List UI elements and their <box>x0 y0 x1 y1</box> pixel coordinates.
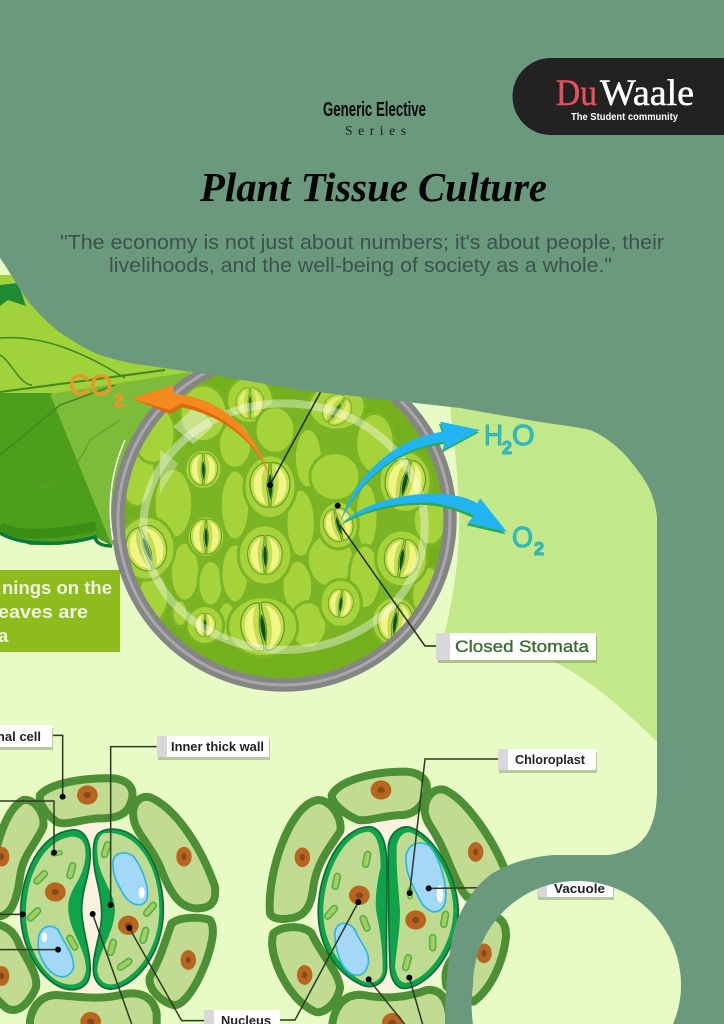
label: Vacuole <box>537 876 614 900</box>
quote <box>60 232 664 277</box>
label: O2: 2 <box>534 539 544 559</box>
label: Chloroplast: Chloroplast <box>515 752 586 767</box>
arrow: O2 out <box>340 494 507 534</box>
title: Plant Tissue Culture <box>199 164 547 210</box>
diagram: closed stoma cell cluster <box>270 772 508 1024</box>
magnifying lens with stomata <box>110 346 457 692</box>
logo: DuWaale: The Student community <box>571 111 678 123</box>
label: Inner thick wall: Inner thick wall <box>171 739 264 754</box>
leader lines: open stoma <box>0 735 205 1024</box>
label: H2O: H <box>484 420 503 452</box>
diagram: open stoma cell cluster <box>0 778 215 1024</box>
label: Inner thick wall <box>157 736 270 760</box>
label: CO2: CO <box>69 370 112 402</box>
arrow: CO2 in <box>132 385 270 480</box>
label: Closed Stomata <box>436 633 597 663</box>
arrow: H2O out <box>341 422 480 521</box>
label: O2: O <box>512 522 533 554</box>
label: epidermal cell <box>0 725 53 750</box>
heading: Generic Elective Series <box>323 99 426 138</box>
label: H2O: 2 <box>502 438 512 458</box>
heading: Generic Elective Series: Generic Elective <box>323 99 426 121</box>
label: CO2: 2 <box>114 391 124 411</box>
leader lines: closed stoma <box>280 759 537 1024</box>
logo: DuWaale <box>512 58 724 135</box>
pointer lines and dots in the lens <box>267 390 438 646</box>
text panel: openings on the leaves <box>0 570 120 652</box>
label: H2O <box>484 420 535 458</box>
label: CO2 <box>69 370 124 411</box>
text panel: openings on the leaves: nings on the <box>2 577 112 598</box>
label: Chloroplast <box>498 749 597 773</box>
label: Closed Stomata: Closed Stomata <box>455 637 590 656</box>
leaf illustration <box>0 275 260 546</box>
label: Nucleus <box>204 1010 280 1024</box>
label: H2O: O <box>512 420 535 452</box>
panel: darker green backdrop on the right <box>440 405 660 745</box>
quote: livelihoods, and the well-being of society as a whole." <box>109 255 612 277</box>
heading: Generic Elective Series: Series <box>345 123 406 138</box>
logo: DuWaale: Du <box>556 73 597 114</box>
label: Vacuole: Vacuole <box>554 881 605 896</box>
quote: "The economy is not just about numbers; it's about people, their <box>60 232 664 254</box>
label: O2 <box>512 522 544 559</box>
text panel: openings on the leaves: eaves are <box>0 601 88 622</box>
logo: DuWaale: Waale <box>600 73 694 114</box>
